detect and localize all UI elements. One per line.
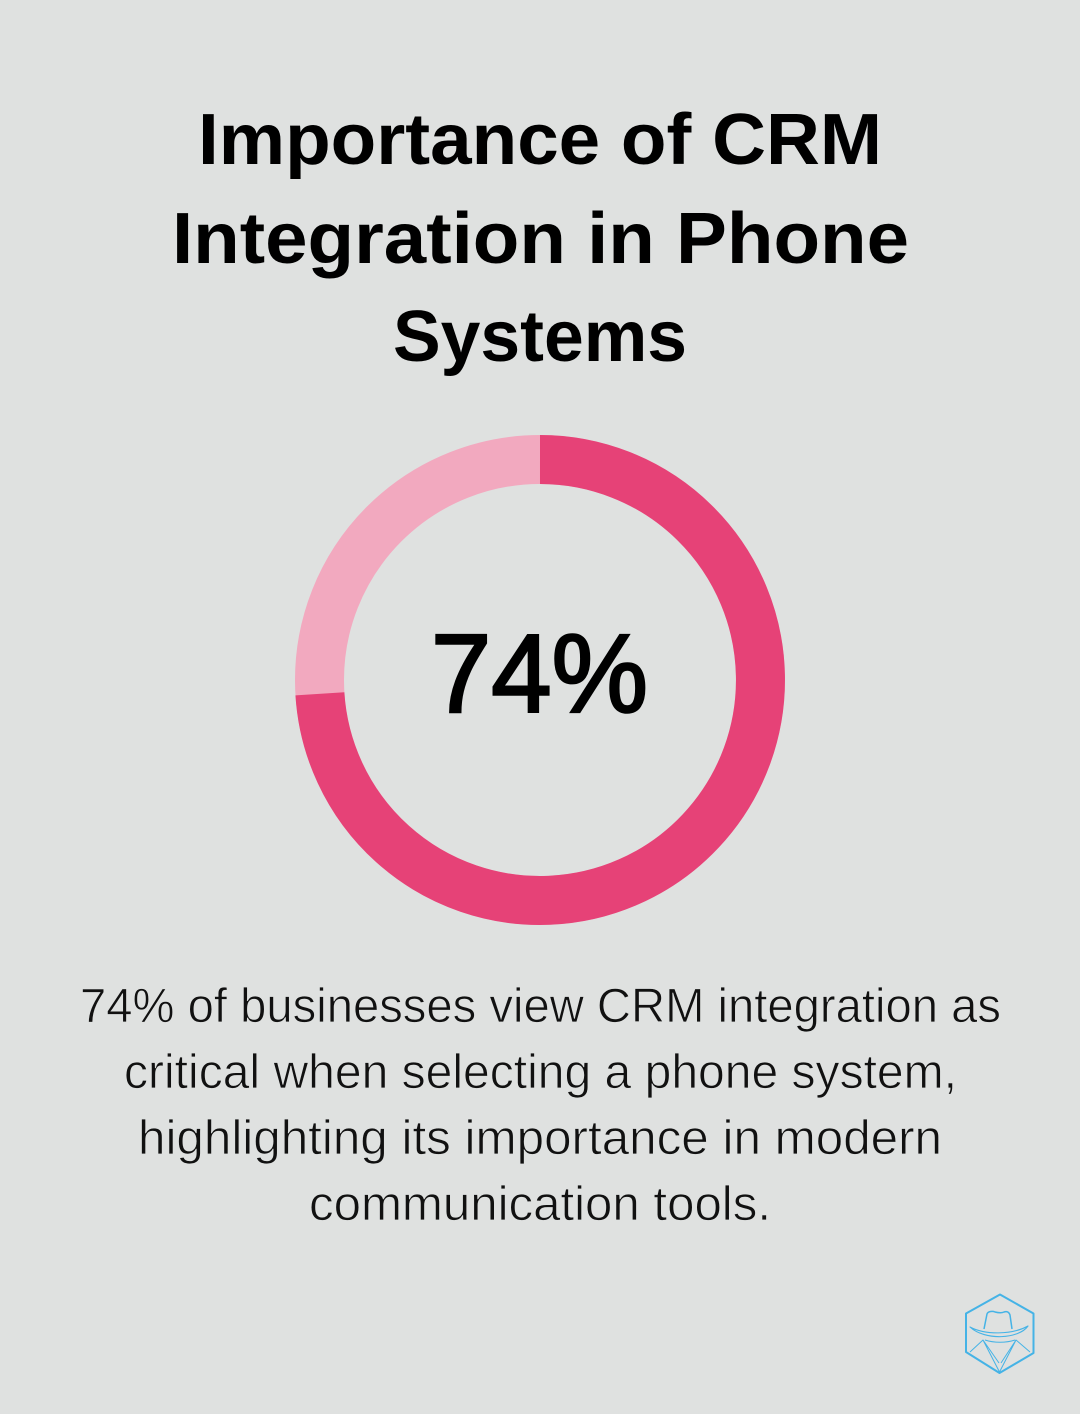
icon: hexagon logo with hat and coat (966, 1294, 1034, 1373)
donut track (320, 460, 760, 900)
donut value arc (320, 460, 760, 900)
description text (80, 980, 1001, 1231)
title (172, 100, 909, 377)
description text: 74% of businesses view CRM integration as (80, 980, 1001, 1033)
title: Systems (393, 297, 687, 377)
description text: communication tools. (309, 1178, 771, 1231)
description text: highlighting its importance in modern (138, 1112, 942, 1165)
description text: critical when selecting a phone system, (124, 1046, 957, 1099)
title: Integration in Phone (172, 199, 909, 279)
donut centre value: 74% (431, 612, 648, 736)
donut chart: 74% (320, 460, 760, 900)
title: Importance of CRM (198, 100, 882, 180)
